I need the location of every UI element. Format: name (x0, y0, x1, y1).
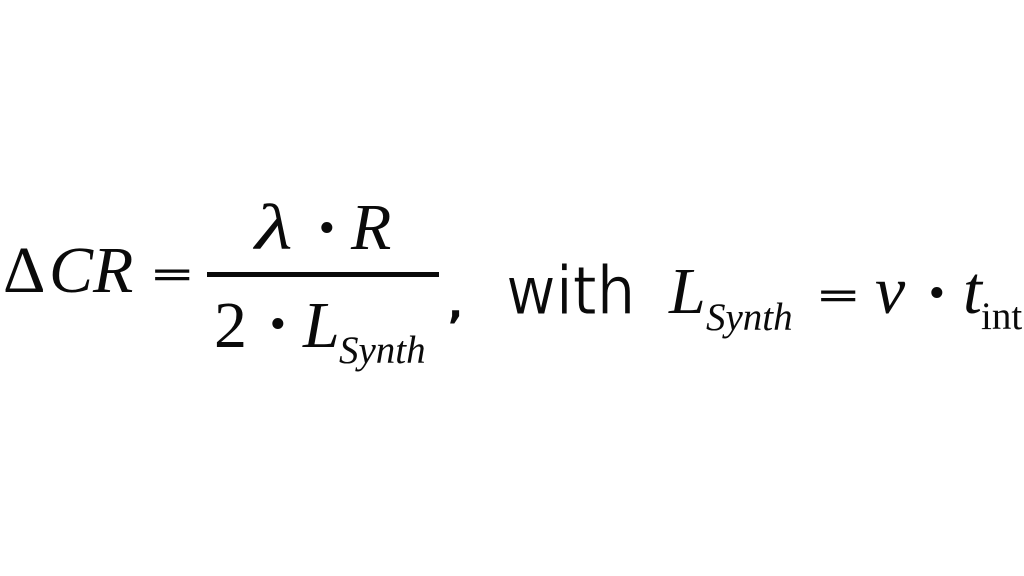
fraction denominator (214, 285, 426, 372)
fraction denominator: Synth (339, 329, 426, 372)
velocity times integration time: t (963, 252, 984, 328)
fraction numerator (253, 189, 391, 265)
fraction bar (207, 272, 439, 277)
right side: L synth (668, 255, 793, 339)
right side: L synth: L (668, 255, 706, 328)
equals sign: = (153, 254, 191, 295)
velocity times integration time: · (926, 254, 948, 330)
comma: , (448, 282, 463, 328)
right equals sign: = (819, 275, 857, 316)
fraction denominator: 2 (214, 289, 247, 362)
velocity times integration time: v (875, 252, 906, 328)
velocity times integration time: int (981, 295, 1022, 338)
left side: delta CR: CR (49, 234, 133, 307)
fraction numerator: · (316, 189, 338, 265)
fraction denominator: L (302, 289, 340, 362)
right side: L synth: Synth (706, 296, 793, 339)
fraction numerator: R (350, 191, 391, 264)
with label: with (506, 253, 635, 331)
left side: delta CR (3, 234, 133, 307)
left side: delta CR: Δ (3, 234, 45, 307)
fraction numerator: λ (253, 191, 293, 263)
velocity times integration time (875, 252, 1022, 338)
fraction denominator: · (266, 285, 289, 361)
